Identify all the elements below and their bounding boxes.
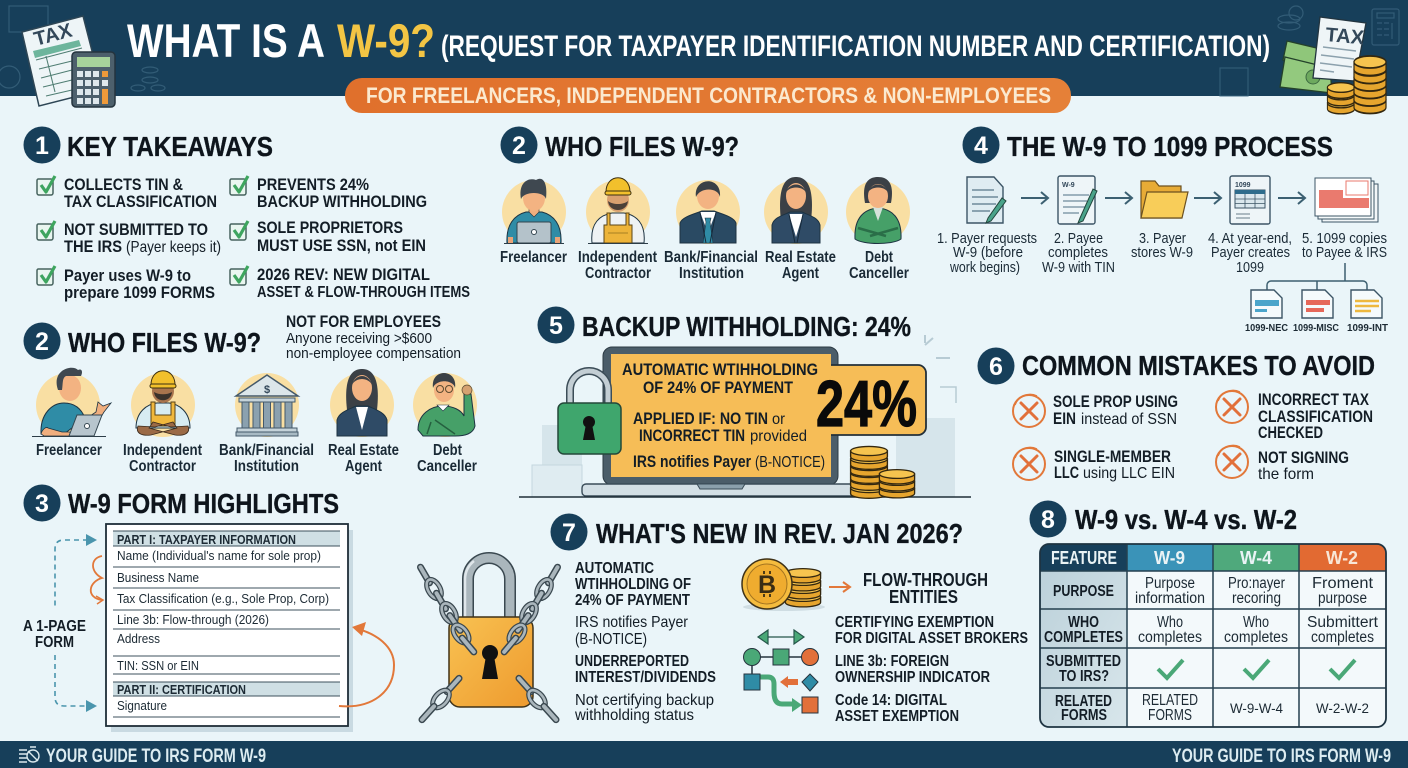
text block: new items: FOR DIGITAL ASSET BROKERS bbox=[835, 630, 1028, 647]
icon: step 1 document and pen bbox=[967, 177, 1006, 223]
persona labels: Freelancer bbox=[500, 249, 567, 266]
table cells: information bbox=[1135, 590, 1205, 607]
table cells: purpose bbox=[1318, 590, 1367, 607]
arrow bbox=[829, 582, 850, 592]
table header labels: W-9 bbox=[1154, 548, 1185, 568]
check items left column: COLLECTS TIN & bbox=[64, 175, 183, 194]
persona labels: Institution bbox=[679, 265, 744, 282]
text block: new items: ASSET EXEMPTION bbox=[835, 708, 959, 725]
heading: comparison: W-9 vs. W-4 vs. W-2 bbox=[1075, 504, 1297, 535]
step labels: W-9 (before bbox=[953, 245, 1023, 261]
mistake: single-member LLC: SINGLE-MEMBER bbox=[1054, 447, 1171, 466]
check items left column: prepare 1099 FORMS bbox=[64, 283, 215, 302]
text block: new items: LINE 3b: FOREIGN bbox=[835, 653, 949, 670]
label: 1-page form bbox=[23, 618, 86, 651]
mistake: incorrect classification: INCORRECT TAX bbox=[1258, 390, 1370, 409]
table cells: FORMS bbox=[1148, 707, 1192, 724]
check items right column: MUST USE SSN, not EIN bbox=[257, 236, 426, 255]
heading: who files: 2 bbox=[512, 132, 526, 160]
screen text: (B-NOTICE) bbox=[755, 454, 825, 471]
check items right column: SOLE PROPRIETORS bbox=[257, 218, 403, 237]
form document: Tax Classification (e.g., Sole Prop, Corp) bbox=[117, 591, 329, 606]
mistake: not signing: the form bbox=[1258, 466, 1314, 483]
note: not for employees: non-employee compensation bbox=[286, 345, 461, 362]
persona labels: Contractor bbox=[585, 265, 651, 282]
heading: common mistakes: 6 bbox=[989, 353, 1003, 381]
step labels: W-9 with TIN bbox=[1042, 260, 1115, 276]
persona labels: Bank/Financial bbox=[219, 442, 314, 459]
icon: green padlock bbox=[558, 371, 621, 454]
step labels: 4. At year-end, bbox=[1208, 231, 1292, 247]
row labels: SUBMITTED bbox=[1046, 653, 1121, 670]
form document: Address bbox=[117, 631, 160, 646]
step labels: stores W-9 bbox=[1131, 245, 1193, 261]
step labels: 2. Payee bbox=[1054, 231, 1103, 247]
heading: who files: WHO FILES W-9? bbox=[545, 131, 739, 162]
screen text: provided bbox=[750, 428, 807, 445]
text block: reasons: Not certifying backup bbox=[575, 692, 714, 709]
panel: common mistakes bbox=[978, 348, 1375, 483]
icon: step 3 folder bbox=[1141, 181, 1188, 218]
mistake: incorrect classification: CHECKED bbox=[1258, 423, 1323, 442]
step labels: 3. Payer bbox=[1139, 231, 1186, 247]
table cells: Who bbox=[1157, 614, 1183, 631]
panel: backup withholding bbox=[519, 306, 971, 498]
persona labels: Freelancer bbox=[36, 442, 102, 459]
label: flow-through entities: ENTITIES bbox=[889, 587, 958, 607]
heading: key takeaways: 1 bbox=[35, 132, 49, 160]
check items left column: (Payer keeps it) bbox=[126, 239, 221, 256]
heading: backup withholding: 5 bbox=[549, 312, 563, 340]
persona labels: Institution bbox=[234, 458, 299, 475]
mistake: sole prop: instead of SSN bbox=[1081, 411, 1177, 428]
table cells: completes bbox=[1311, 629, 1374, 646]
tree to 1099 variants: 1099-NEC bbox=[1245, 322, 1288, 334]
table cells: W-2-W-2 bbox=[1316, 700, 1369, 716]
persona labels: Bank/Financial bbox=[664, 249, 758, 266]
label: 1-page form: FORM bbox=[35, 634, 74, 651]
step labels: to Payee & IRS bbox=[1302, 245, 1387, 261]
title: WHAT IS A bbox=[127, 14, 325, 67]
text block: reasons: withholding status bbox=[574, 707, 694, 724]
step labels: 1099 bbox=[1236, 260, 1264, 276]
panel: W-9 to 1099 process bbox=[937, 126, 1389, 334]
form document: Name (Individual's name for sole prop) bbox=[117, 548, 321, 563]
table cells: W-9-W-4 bbox=[1230, 700, 1283, 716]
dashed bracket with arrows bbox=[55, 534, 97, 712]
arrow bbox=[1105, 192, 1132, 204]
form document bbox=[106, 524, 353, 732]
persona labels: Canceller bbox=[849, 265, 909, 282]
step labels bbox=[937, 231, 1387, 276]
footer band bbox=[0, 741, 1408, 768]
table cells: Who bbox=[1243, 614, 1269, 631]
tree to 1099 variants bbox=[1245, 263, 1389, 334]
icon: step 5 1099 copies bbox=[1315, 178, 1378, 222]
header band bbox=[0, 0, 1408, 96]
persona labels: Real Estate bbox=[765, 249, 836, 266]
icon: bitcoin and coins: B bbox=[758, 571, 776, 599]
persona labels: Contractor bbox=[129, 458, 196, 475]
table cells: completes bbox=[1224, 629, 1288, 646]
persona labels: Debt bbox=[865, 249, 893, 266]
table cells: Submittert bbox=[1307, 614, 1379, 631]
text block: reasons: (B-NOTICE) bbox=[575, 631, 647, 648]
icon: bank building: $ bbox=[264, 384, 270, 396]
table cells: Purpose bbox=[1145, 575, 1195, 592]
check items right column: 2026 REV: NEW DIGITAL bbox=[257, 265, 430, 284]
icon: independent contractor bbox=[586, 178, 650, 244]
icon: independent contractor bbox=[131, 371, 195, 437]
subtitle pill bbox=[345, 78, 1071, 113]
table cells: RELATED bbox=[1142, 692, 1198, 709]
table cells: Pro:nayer bbox=[1228, 575, 1285, 592]
persona labels: Independent bbox=[123, 442, 202, 459]
heading: comparison bbox=[1030, 500, 1297, 538]
check items left column bbox=[37, 175, 221, 302]
heading: process bbox=[962, 126, 1333, 164]
icon: flow diagram bbox=[744, 630, 818, 713]
heading: form highlights bbox=[24, 484, 339, 522]
row labels bbox=[1044, 583, 1123, 724]
arrow bbox=[1194, 192, 1221, 204]
icon: real estate agent bbox=[764, 177, 828, 244]
text block: reasons: WTIHHOLDING OF bbox=[575, 576, 691, 593]
text block: new items: CERTIFYING EXEMPTION bbox=[835, 614, 994, 631]
orange brace arrows bbox=[91, 556, 103, 604]
icon: step 4 1099 sheet: 1099 bbox=[1235, 182, 1251, 189]
panel: form comparison bbox=[1030, 500, 1386, 727]
mistake: not signing: NOT SIGNING bbox=[1258, 448, 1349, 467]
tree to 1099 variants: 1099-INT bbox=[1347, 322, 1389, 334]
screen text: or bbox=[772, 411, 786, 428]
mistake: not signing bbox=[1216, 445, 1349, 483]
table header labels: FEATURE bbox=[1051, 548, 1117, 568]
table header labels bbox=[1051, 548, 1358, 568]
row labels: PURPOSE bbox=[1053, 583, 1114, 600]
text block: new items: Code 14: DIGITAL bbox=[835, 692, 947, 709]
note: not for employees: Anyone receiving >$600 bbox=[286, 330, 432, 347]
check items right column bbox=[230, 175, 470, 301]
panel: who files W-9 left bbox=[24, 312, 477, 475]
icon: debt canceller bbox=[846, 177, 910, 244]
icon: money, tax sheet and coins bbox=[1280, 17, 1386, 114]
heading: process: 4 bbox=[974, 132, 988, 160]
screen text: INCORRECT TIN bbox=[639, 426, 745, 445]
row labels: RELATED bbox=[1055, 693, 1112, 710]
title: W-9? bbox=[337, 14, 435, 67]
mistake: sole prop bbox=[1013, 392, 1178, 428]
icon: tax form and calculator bbox=[22, 16, 115, 107]
mistake: sole prop: SOLE PROP USING bbox=[1053, 392, 1178, 411]
screen text bbox=[622, 360, 825, 471]
icon: coin stacks bbox=[851, 446, 915, 498]
screen text: OF 24% OF PAYMENT bbox=[643, 378, 794, 397]
heading: backup withholding: BACKUP WITHHOLDING: 24% bbox=[582, 311, 911, 342]
icon: bank building bbox=[235, 373, 299, 437]
step labels: Payer creates bbox=[1211, 245, 1290, 261]
check items right column: BACKUP WITHHOLDING bbox=[257, 192, 427, 211]
table header labels: W-2 bbox=[1326, 548, 1358, 568]
check items left column: NOT SUBMITTED TO bbox=[64, 220, 208, 239]
orange return arrow bbox=[339, 622, 394, 706]
text block: reasons: IRS notifies Payer bbox=[575, 614, 689, 631]
mistake: sole prop: EIN bbox=[1053, 409, 1076, 428]
persona labels: Real Estate bbox=[328, 442, 399, 459]
icon: IRS eagle bbox=[19, 747, 39, 762]
label: flow-through entities: FLOW-THROUGH bbox=[863, 570, 988, 590]
heading: what's new bbox=[550, 514, 963, 550]
check items left column: Payer uses W-9 to bbox=[64, 266, 191, 285]
icon: chained padlock bbox=[420, 558, 558, 720]
persona labels bbox=[500, 249, 909, 282]
heading: who files bbox=[500, 126, 739, 164]
check items right column: ASSET & FLOW-THROUGH ITEMS bbox=[257, 284, 470, 301]
text block: reasons: 24% OF PAYMENT bbox=[575, 592, 690, 609]
icon: bank financial person bbox=[676, 180, 740, 244]
label: flow-through entities bbox=[863, 570, 988, 607]
heading: comparison: 8 bbox=[1041, 506, 1055, 534]
heading: form highlights: 3 bbox=[35, 490, 49, 518]
panel: what's new bbox=[420, 514, 1028, 725]
persona labels: Debt bbox=[433, 442, 462, 459]
persona labels: Agent bbox=[345, 458, 382, 475]
heading: process: THE W-9 TO 1099 PROCESS bbox=[1007, 131, 1333, 162]
subtitle pill: FOR FREELANCERS, INDEPENDENT CONTRACTORS & NON-EMPLOYEES bbox=[366, 83, 1051, 108]
icon: step 4 1099 sheet bbox=[1230, 176, 1270, 224]
persona labels bbox=[36, 442, 477, 475]
icon: step 2 W-9 and pen bbox=[1058, 176, 1097, 224]
check items right column: PREVENTS 24% bbox=[257, 175, 369, 194]
icon: step 2 W-9 and pen: W-9 bbox=[1062, 182, 1075, 189]
icon: debt canceller bbox=[413, 373, 477, 437]
note: not for employees: NOT FOR EMPLOYEES bbox=[286, 312, 441, 331]
heading: key takeaways bbox=[24, 126, 273, 164]
mistake: incorrect classification: CLASSIFICATION bbox=[1258, 407, 1373, 426]
text block: new items bbox=[835, 614, 1028, 725]
text block: new items: OWNERSHIP INDICATOR bbox=[835, 669, 990, 686]
check items left column: TAX CLASSIFICATION bbox=[64, 192, 217, 211]
screen text: IRS notifies Payer bbox=[633, 452, 751, 471]
panel: W-9 form highlights bbox=[23, 484, 394, 732]
heading: common mistakes bbox=[978, 348, 1375, 384]
text block: reasons bbox=[574, 560, 716, 724]
screen text: AUTOMATIC WTIHHOLDING bbox=[622, 360, 818, 379]
background buildings bbox=[532, 335, 956, 497]
persona labels: Agent bbox=[782, 265, 819, 282]
table cells: recoring bbox=[1232, 590, 1281, 607]
persona labels: Independent bbox=[578, 249, 657, 266]
heading: what's new: 7 bbox=[562, 519, 576, 547]
table header labels: W-4 bbox=[1240, 548, 1272, 568]
icon: tax form and calculator: TAX bbox=[32, 19, 75, 51]
label: 1-page form: A 1-PAGE bbox=[23, 618, 86, 635]
form document: Signature bbox=[117, 698, 167, 713]
callout: 24%: 24% bbox=[816, 367, 917, 440]
text block: reasons: INTEREST/DIVIDENDS bbox=[575, 669, 716, 686]
form document: Line 3b: Flow-through (2026) bbox=[117, 612, 269, 627]
icon: freelancer bbox=[32, 368, 111, 437]
title bbox=[127, 14, 1270, 67]
arrow bbox=[1278, 192, 1305, 204]
icon: real estate agent bbox=[330, 369, 394, 437]
heading: form highlights: W-9 FORM HIGHLIGHTS bbox=[68, 488, 339, 519]
check items left column: THE IRS bbox=[64, 237, 122, 256]
table cells bbox=[1135, 575, 1379, 724]
mistake: single-member LLC: LLC bbox=[1054, 463, 1079, 482]
heading: what's new: WHAT'S NEW IN REV. JAN 2026? bbox=[596, 518, 963, 549]
table cells: Froment bbox=[1312, 575, 1374, 592]
heading: backup withholding bbox=[538, 306, 911, 344]
footer band: YOUR GUIDE TO IRS FORM W-9 bbox=[46, 746, 266, 767]
form document: TIN: SSN or EIN bbox=[117, 658, 199, 673]
row labels: FORMS bbox=[1061, 707, 1107, 724]
persona labels: Canceller bbox=[417, 458, 477, 475]
step labels: completes bbox=[1048, 245, 1108, 261]
mistake: single-member LLC: using LLC EIN bbox=[1083, 465, 1175, 482]
screen text: APPLIED IF: NO TIN bbox=[633, 409, 768, 428]
laptop bbox=[582, 347, 860, 496]
tree to 1099 variants: 1099-MISC bbox=[1293, 322, 1339, 334]
mistake: single-member LLC bbox=[1013, 447, 1175, 482]
form document: PART I: TAXPAYER INFORMATION bbox=[117, 532, 296, 547]
row labels: WHO bbox=[1068, 614, 1099, 631]
heading: who files: WHO FILES W-9? bbox=[68, 327, 261, 358]
row labels: COMPLETES bbox=[1044, 629, 1123, 646]
icon: bitcoin and coins bbox=[742, 559, 825, 611]
step labels: work begins) bbox=[949, 260, 1020, 276]
icon: freelancer bbox=[502, 179, 566, 244]
heading: who files: 2 bbox=[35, 328, 49, 356]
row labels: TO IRS? bbox=[1059, 668, 1109, 685]
mistake: incorrect classification bbox=[1216, 390, 1373, 442]
step labels: 5. 1099 copies bbox=[1302, 231, 1387, 247]
ground line bbox=[519, 496, 971, 498]
heading: who files bbox=[24, 322, 261, 360]
icon: money, tax sheet and coins: TAX bbox=[1325, 24, 1366, 49]
comparison table bbox=[1040, 544, 1386, 727]
text block: reasons: AUTOMATIC bbox=[575, 560, 654, 577]
arrow bbox=[1021, 192, 1048, 204]
panel: who files W-9 top bbox=[500, 126, 910, 282]
note: not for employees bbox=[286, 312, 461, 362]
form document: Business Name bbox=[117, 570, 199, 585]
panel: key takeaways bbox=[24, 126, 470, 302]
step labels: 1. Payer requests bbox=[937, 231, 1037, 247]
table cells: completes bbox=[1138, 629, 1202, 646]
heading: key takeaways: KEY TAKEAWAYS bbox=[67, 131, 273, 162]
text block: reasons: UNDERREPORTED bbox=[575, 653, 689, 670]
form document: PART II: CERTIFICATION bbox=[117, 682, 246, 697]
